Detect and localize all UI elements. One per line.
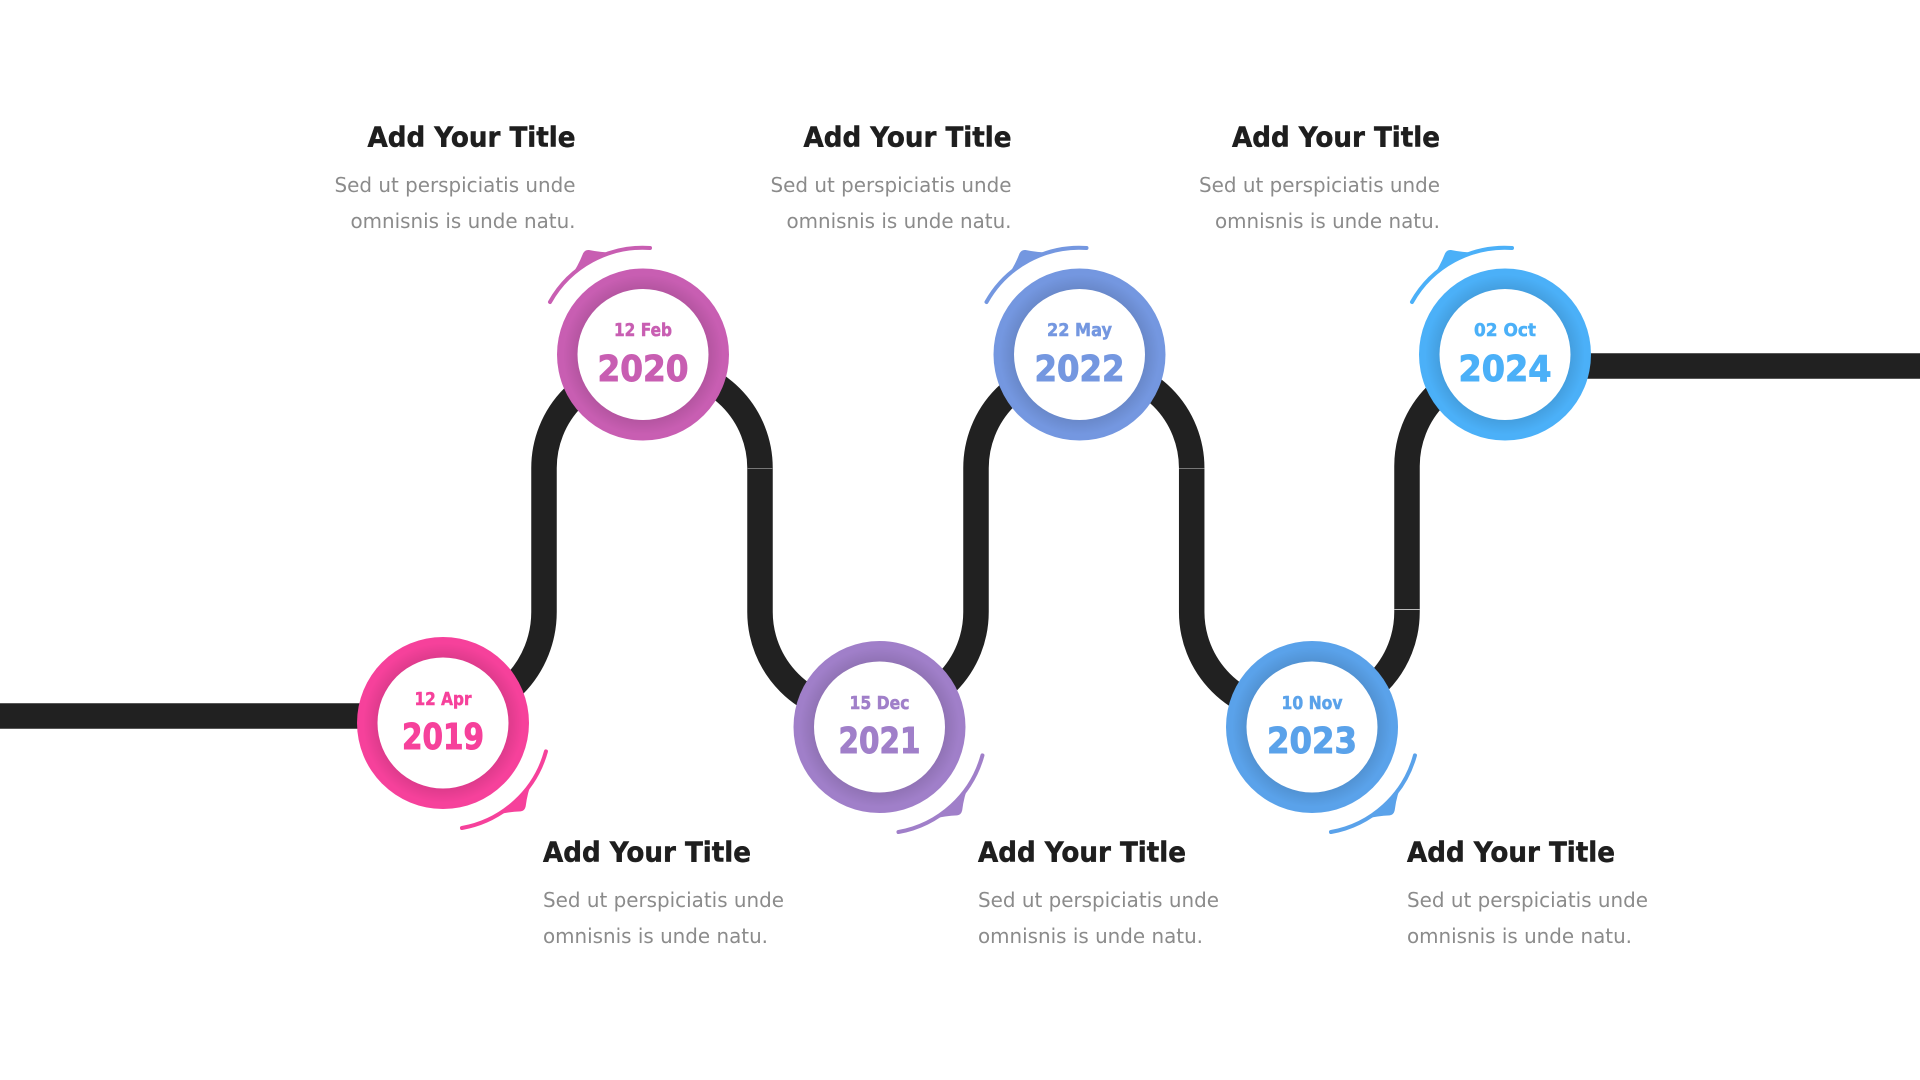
- swoosh 2023: [1318, 755, 1428, 832]
- milestone 2023: [1226, 641, 1428, 832]
- text block 2020: [334, 120, 576, 233]
- milestone 2024: [1412, 248, 1591, 440]
- heading 2019: Add Your Title: [543, 836, 751, 868]
- body 2020: Sed ut perspiciatis unde: [334, 173, 576, 197]
- ring 2023: [1226, 641, 1398, 813]
- date 2020: 12 Feb: [614, 320, 672, 341]
- body 2020: omnisnis is unde natu.: [350, 209, 576, 233]
- ring 2020: [557, 268, 729, 440]
- swoosh 2019: [449, 751, 559, 828]
- swoosh 2022: [986, 248, 1086, 302]
- body 2022: Sed ut perspiciatis unde: [770, 173, 1012, 197]
- ring 2021: [794, 641, 966, 813]
- ring 2024: [1419, 268, 1591, 440]
- year 2019: 2019: [402, 717, 484, 758]
- date 2019: 12 Apr: [414, 689, 472, 710]
- body 2023: omnisnis is unde natu.: [1407, 924, 1632, 948]
- text block 2019: [543, 836, 784, 948]
- ring 2022: [994, 268, 1166, 440]
- heading 2020: Add Your Title: [368, 120, 576, 154]
- milestone 2022: [986, 248, 1166, 440]
- milestone 2020: [550, 248, 729, 440]
- body 2021: omnisnis is unde natu.: [978, 924, 1203, 948]
- year 2024: 2024: [1458, 349, 1552, 390]
- milestone 2019: [357, 637, 559, 828]
- text block 2021: [978, 836, 1219, 948]
- date 2022: 22 May: [1047, 320, 1112, 341]
- swoosh 2020: [550, 248, 650, 302]
- year 2023: 2023: [1267, 721, 1357, 762]
- date 2023: 10 Nov: [1282, 693, 1343, 714]
- date 2021: 15 Dec: [850, 693, 910, 714]
- year 2021: 2021: [838, 721, 920, 762]
- ring 2019: [357, 637, 529, 809]
- body 2024: omnisnis is unde natu.: [1215, 209, 1440, 233]
- year 2020: 2020: [598, 349, 688, 390]
- body 2022: omnisnis is unde natu.: [786, 209, 1012, 233]
- body 2024: Sed ut perspiciatis unde: [1199, 173, 1440, 197]
- heading 2024: Add Your Title: [1232, 120, 1440, 154]
- date 2024: 02 Oct: [1474, 320, 1536, 341]
- swoosh 2024: [1412, 248, 1512, 302]
- text block 2024: [1199, 120, 1440, 233]
- text block 2023: [1407, 836, 1648, 948]
- body 2019: Sed ut perspiciatis unde: [543, 888, 784, 912]
- swoosh 2021: [885, 755, 996, 832]
- body 2019: omnisnis is unde natu.: [543, 924, 768, 948]
- timeline path: [0, 366, 1920, 716]
- text block 2022: [770, 120, 1012, 233]
- milestone 2021: [794, 641, 996, 832]
- heading 2021: Add Your Title: [978, 836, 1186, 868]
- body 2021: Sed ut perspiciatis unde: [978, 888, 1219, 912]
- body 2023: Sed ut perspiciatis unde: [1407, 888, 1648, 912]
- heading 2023: Add Your Title: [1407, 836, 1615, 868]
- year 2022: 2022: [1034, 349, 1124, 390]
- heading 2022: Add Your Title: [804, 120, 1012, 154]
